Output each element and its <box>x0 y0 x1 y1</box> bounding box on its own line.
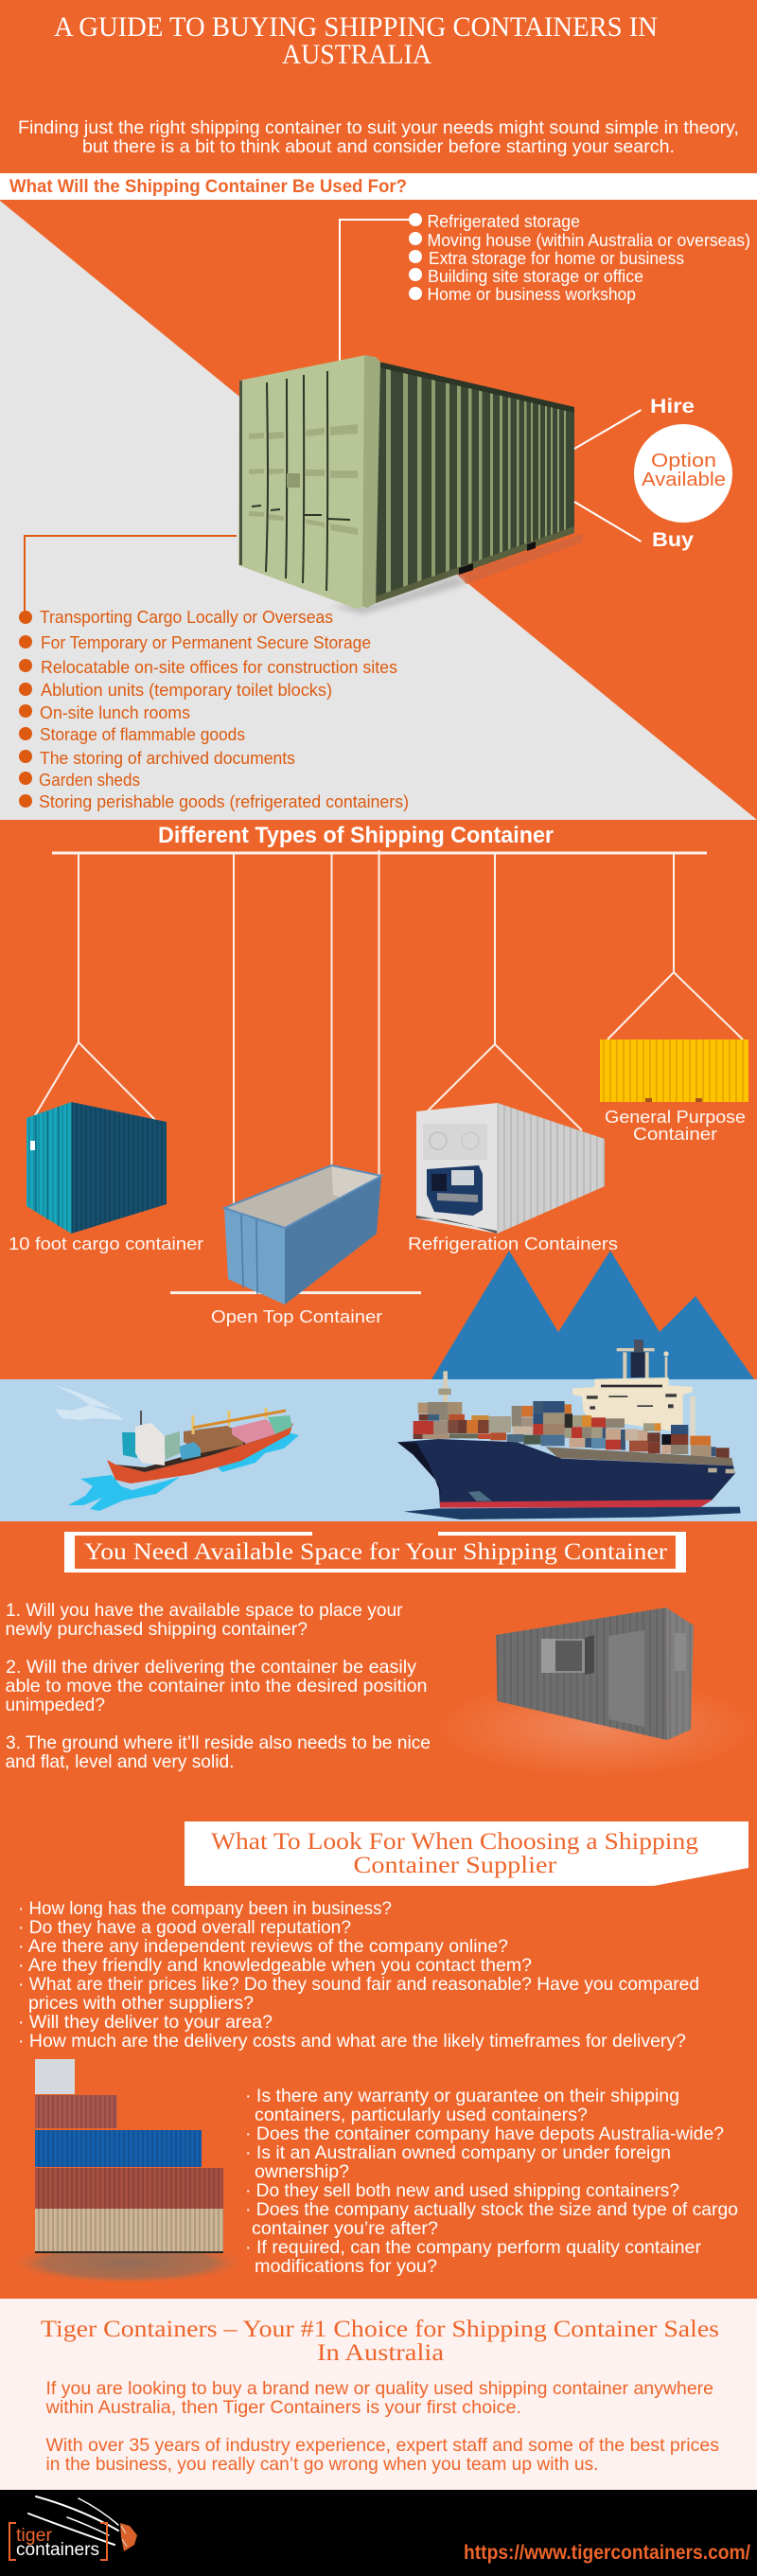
label: 10 foot: 10 foot cargo container <box>9 1235 203 1253</box>
sea and sky band <box>0 1379 757 1521</box>
closing paragraphs: With over 35 years of industry experience, expert staff and some of the best prices <box>45 2435 719 2456</box>
container: 10 foot <box>26 1102 167 1234</box>
question list 2: container you’re after? <box>252 2218 438 2239</box>
list: other uses: Building site storage or office <box>428 266 643 286</box>
intro text: Finding just the right shipping container to suit your needs might sound simple in theory, <box>18 117 739 138</box>
heading bar <box>0 173 757 200</box>
closing paragraphs: If you are looking to buy a brand new or quality used shipping container anywhere <box>45 2378 713 2399</box>
blue mountains <box>431 1251 754 1379</box>
closing heading: Tiger Containers – Your #1 Choice for Shipping Container Sales <box>41 2317 719 2342</box>
question list 1: · How long has the company been in business? <box>18 1898 392 1919</box>
panel: what will the container be used for <box>0 173 757 820</box>
option available badge <box>634 424 732 523</box>
question list 1 <box>18 1898 699 2052</box>
label: general purpose <box>605 1108 746 1144</box>
stacked containers <box>35 2059 223 2253</box>
intro text <box>18 117 739 157</box>
closing heading: In Australia <box>317 2340 444 2366</box>
grey office container <box>496 1608 694 1740</box>
logo: tiger containers: tiger <box>16 2526 53 2546</box>
numbered questions: and flat, level and very solid. <box>6 1751 235 1772</box>
logo: tiger containers: containers <box>16 2540 99 2560</box>
list: other uses: Extra storage for home or business <box>429 248 684 268</box>
container: general purpose <box>600 1039 748 1102</box>
panel: what to look for when choosing a supplier <box>7 1821 748 2284</box>
heading box <box>64 1532 686 1572</box>
shelf line <box>170 1291 421 1294</box>
connector to orange list <box>25 536 237 613</box>
list: container uses <box>19 607 409 811</box>
numbered questions: unimpeded? <box>6 1695 105 1715</box>
logo: tiger containers <box>9 2496 137 2560</box>
question list 1: · Will they deliver to your area? <box>18 2012 273 2033</box>
green shipping container <box>238 350 574 615</box>
footer <box>0 2490 757 2576</box>
list: container uses: Garden sheds <box>39 770 140 790</box>
hire label: Hire <box>650 396 695 417</box>
question list 2: · Is it an Australian owned company or under foreign <box>245 2142 671 2163</box>
list: other uses: Home or business workshop <box>428 284 636 304</box>
title: AUSTRALIA <box>282 39 431 70</box>
closing heading <box>41 2317 719 2366</box>
question list 2: · Is there any warranty or guarantee on their shipping <box>245 2086 679 2106</box>
heading banner <box>185 1821 748 1886</box>
heading bar: What Will the Shipping Container Be Used For? <box>9 177 407 197</box>
question list 2: modifications for you? <box>255 2256 437 2277</box>
list: container uses: Transporting Cargo Locally or Overseas <box>40 607 333 627</box>
question list 1: · How much are the delivery costs and what are the likely timeframes for delivery? <box>18 2031 686 2052</box>
numbered questions: 2. Will the driver delivering the container be easily <box>6 1657 416 1678</box>
option available badge: Option <box>651 451 716 471</box>
container: open top <box>224 1165 381 1305</box>
question list 1: · Do they have a good overall reputation? <box>18 1917 351 1938</box>
intro text: but there is a bit to think about and consider before starting your search. <box>82 136 675 157</box>
label: general purpose: General Purpose <box>605 1108 746 1127</box>
label: general purpose: Container <box>633 1125 717 1144</box>
question list 2: · Do they sell both new and used shipping containers? <box>245 2180 679 2201</box>
closing paragraphs <box>44 2378 719 2475</box>
numbered questions: newly purchased shipping container? <box>6 1619 308 1640</box>
list: container uses: Storage of flammable goods <box>40 724 245 744</box>
hire and buy connectors <box>574 410 642 542</box>
question list 2: ownership? <box>255 2161 349 2182</box>
numbered questions: able to move the container into the desired position <box>6 1676 428 1697</box>
question list 2: · Does the container company have depots Australia-wide? <box>245 2123 724 2144</box>
panel: you need available space <box>6 1532 757 1777</box>
label: refrigeration: Refrigeration Containers <box>408 1235 618 1253</box>
numbered questions: 3. The ground where it’ll reside also needs to be nice <box>6 1732 431 1753</box>
numbered questions <box>6 1600 431 1772</box>
title: A GUIDE TO BUYING SHIPPING CONTAINERS IN <box>54 11 658 43</box>
question list 1: · Are they friendly and knowledgeable when you contact them? <box>18 1955 532 1976</box>
illustrated cargo ship <box>55 1385 299 1511</box>
heading: Different Types of Shipping Container <box>158 823 554 848</box>
list: other uses <box>409 211 750 304</box>
question list 2: · Does the company actually stock the size and type of cargo <box>245 2199 738 2220</box>
list: container uses: Storing perishable goods (refrigerated containers) <box>39 791 409 811</box>
question list 1: · What are their prices like? Do they sound fair and reasonable? Have you compared <box>18 1974 699 1995</box>
grey diagonal background <box>0 201 757 820</box>
buy label: Buy <box>652 529 694 551</box>
closing paragraphs: within Australia, then Tiger Containers is your first choice. <box>44 2397 521 2418</box>
connector to white list <box>340 220 410 362</box>
list: container uses: The storing of archived documents <box>40 748 295 768</box>
ground glow <box>435 1679 757 1777</box>
heading box: You Need Available Space for Your Shipping Container <box>84 1539 668 1565</box>
list: other uses: Refrigerated storage <box>428 211 580 231</box>
panel: different types of shipping container <box>9 823 748 1326</box>
heading banner: Container Supplier <box>354 1853 557 1878</box>
panel: tiger containers closing <box>0 2299 757 2490</box>
question list 1: prices with other suppliers? <box>28 1993 254 2014</box>
list: container uses: On-site lunch rooms <box>40 702 190 722</box>
hanging rail and cables <box>34 850 743 1206</box>
container: refrigeration <box>416 1103 605 1234</box>
question list 2 <box>245 2086 738 2277</box>
label: open top: Open Top Container <box>211 1307 382 1326</box>
container shadow <box>331 533 584 614</box>
numbered questions: 1. Will you have the available space to place your <box>6 1600 403 1621</box>
list: container uses: For Temporary or Permanent Secure Storage <box>41 632 371 652</box>
option available badge: Available <box>642 470 726 490</box>
ground under stack <box>7 2241 249 2284</box>
closing paragraphs: in the business, you really can’t go wrong when you team up with us. <box>45 2454 598 2475</box>
heading banner: What To Look For When Choosing a Shipping <box>211 1829 699 1855</box>
photo of container ship <box>397 1340 741 1519</box>
list: container uses: Ablution units (temporary toilet blocks) <box>41 680 332 700</box>
question list 2: containers, particularly used containers? <box>255 2105 588 2125</box>
list: container uses: Relocatable on-site offices for construction sites <box>41 657 397 677</box>
question list 2: · If required, can the company perform quality container <box>245 2237 702 2258</box>
list: other uses: Moving house (within Australia or overseas) <box>428 230 750 250</box>
question list 1: · Are there any independent reviews of the company online? <box>18 1936 508 1957</box>
title <box>54 11 658 70</box>
